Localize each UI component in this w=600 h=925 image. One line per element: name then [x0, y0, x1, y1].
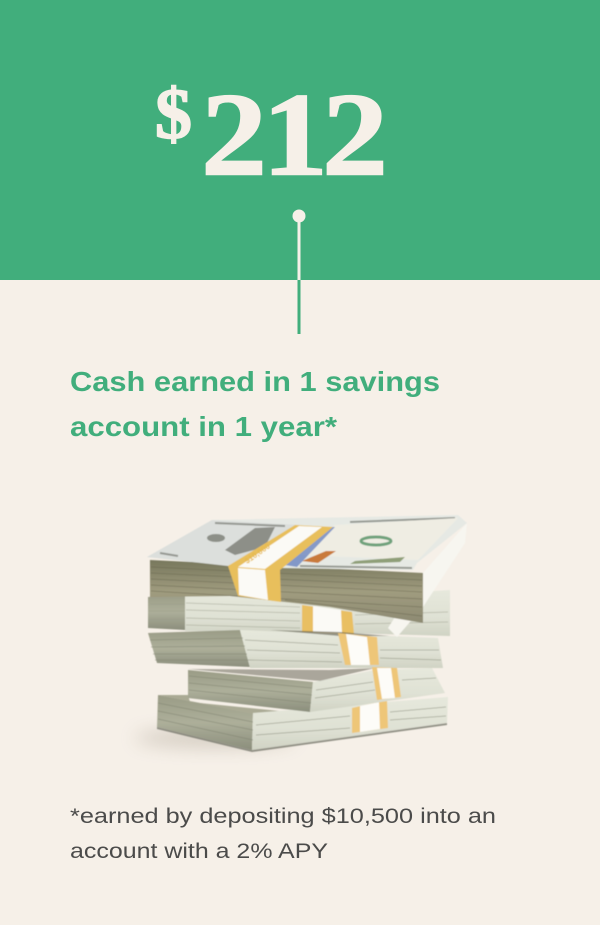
headline: $212: 212 — [201, 69, 388, 201]
image: stack of cash bundles — [135, 515, 467, 752]
heading: cash earned: Cash earned in 1 savings — [70, 366, 440, 397]
bundle 1: top with banknote — [147, 515, 467, 637]
panel: green header — [0, 0, 600, 280]
bundle 5: bottom — [157, 695, 448, 752]
bundle 3 — [148, 630, 443, 668]
bundle 1 currency strap — [228, 525, 333, 602]
bundle 4 — [188, 667, 445, 712]
footnote: account with a 2% APY — [70, 840, 328, 863]
bundle 2: behind the top bundle — [148, 590, 450, 636]
bundle 1 currency strap: $10,000 — [243, 541, 272, 566]
connector: dot and line — [292, 210, 306, 334]
footnote: *earned by depositing $10,500 into an — [70, 805, 496, 828]
headline: $212: $ — [155, 74, 192, 154]
footnote — [70, 805, 496, 863]
heading: cash earned: account in 1 year* — [70, 411, 337, 442]
heading: cash earned — [70, 366, 440, 442]
